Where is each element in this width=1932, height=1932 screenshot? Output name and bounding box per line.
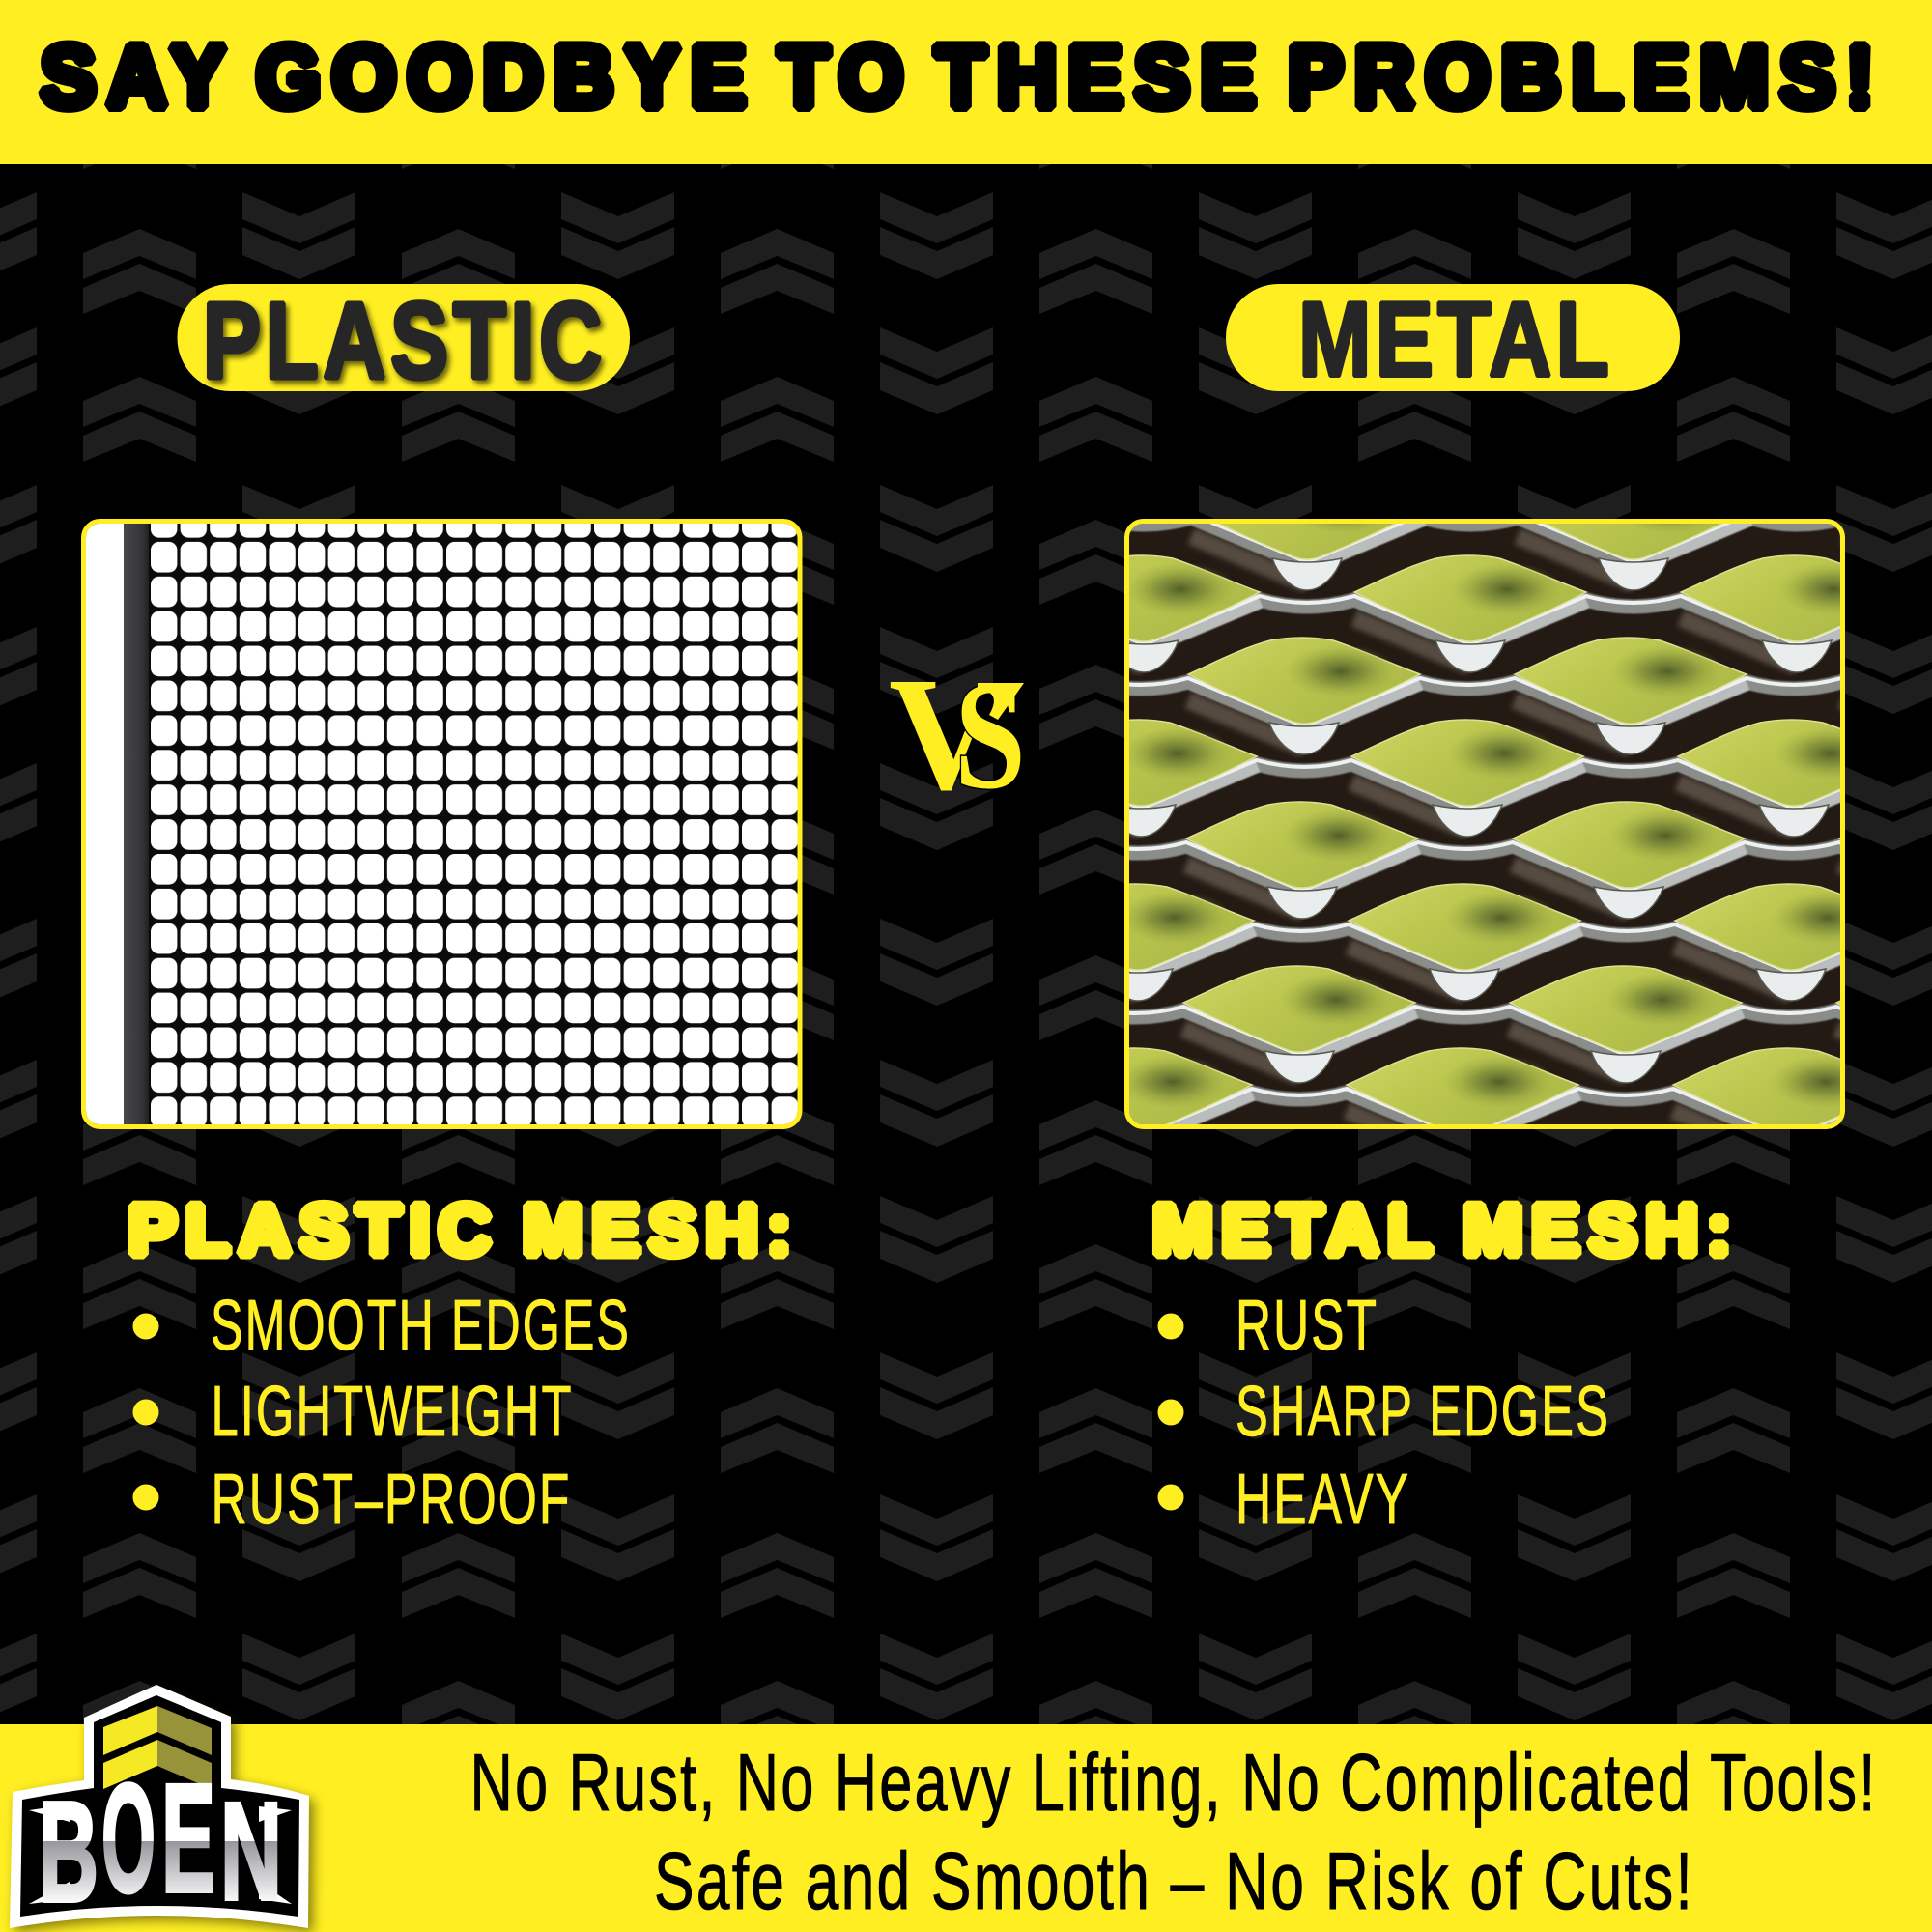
bullet: rust-proof: [133, 1459, 572, 1539]
bullet: lightweight: [133, 1371, 574, 1451]
logo wordmark: [39, 1751, 282, 1932]
footer banner: [0, 1724, 1932, 1932]
bullet: heavy: HEAVY: [1236, 1459, 1410, 1539]
panel: plastic mesh photo: [83, 522, 800, 1126]
bullet: smooth edges: [133, 1285, 631, 1365]
bullet: sharp edges: [1157, 1371, 1610, 1451]
bullet: rust-proof: RUST–PROOF: [211, 1459, 572, 1539]
plastic label text: PLASTIC: [203, 280, 607, 401]
logo wordmark: B: [39, 1773, 99, 1932]
bullet: sharp edges: SHARP EDGES: [1236, 1371, 1610, 1451]
logo wordmark: O: [101, 1751, 156, 1924]
plastic mesh heading: PLASTIC MESH:: [128, 1190, 800, 1269]
icon: versus mark: S: [954, 649, 1026, 821]
panel: metal mesh photo: [1124, 519, 1845, 1129]
plastic label pill: [178, 280, 630, 401]
header banner: [0, 0, 1932, 164]
metal label pill: [1226, 280, 1680, 399]
logo: BOEN: [10, 1685, 309, 1932]
bullet: heavy: [1157, 1459, 1410, 1539]
bullet: smooth edges: SMOOTH EDGES: [211, 1285, 631, 1365]
metal mesh heading: METAL MESH:: [1152, 1190, 1740, 1269]
text block: metal mesh drawbacks: [1152, 1190, 1740, 1539]
text block: plastic mesh benefits: [128, 1190, 800, 1539]
logo wordmark: E: [161, 1751, 215, 1924]
icon: versus mark: V: [889, 644, 1003, 824]
logo wordmark: N: [220, 1774, 282, 1929]
bullet: rust: RUST: [1236, 1285, 1378, 1365]
metal label text: METAL: [1298, 280, 1613, 399]
icon: versus mark: [891, 682, 1024, 790]
bullet: rust: [1157, 1285, 1378, 1365]
bullet: lightweight: LIGHTWEIGHT: [211, 1371, 574, 1451]
